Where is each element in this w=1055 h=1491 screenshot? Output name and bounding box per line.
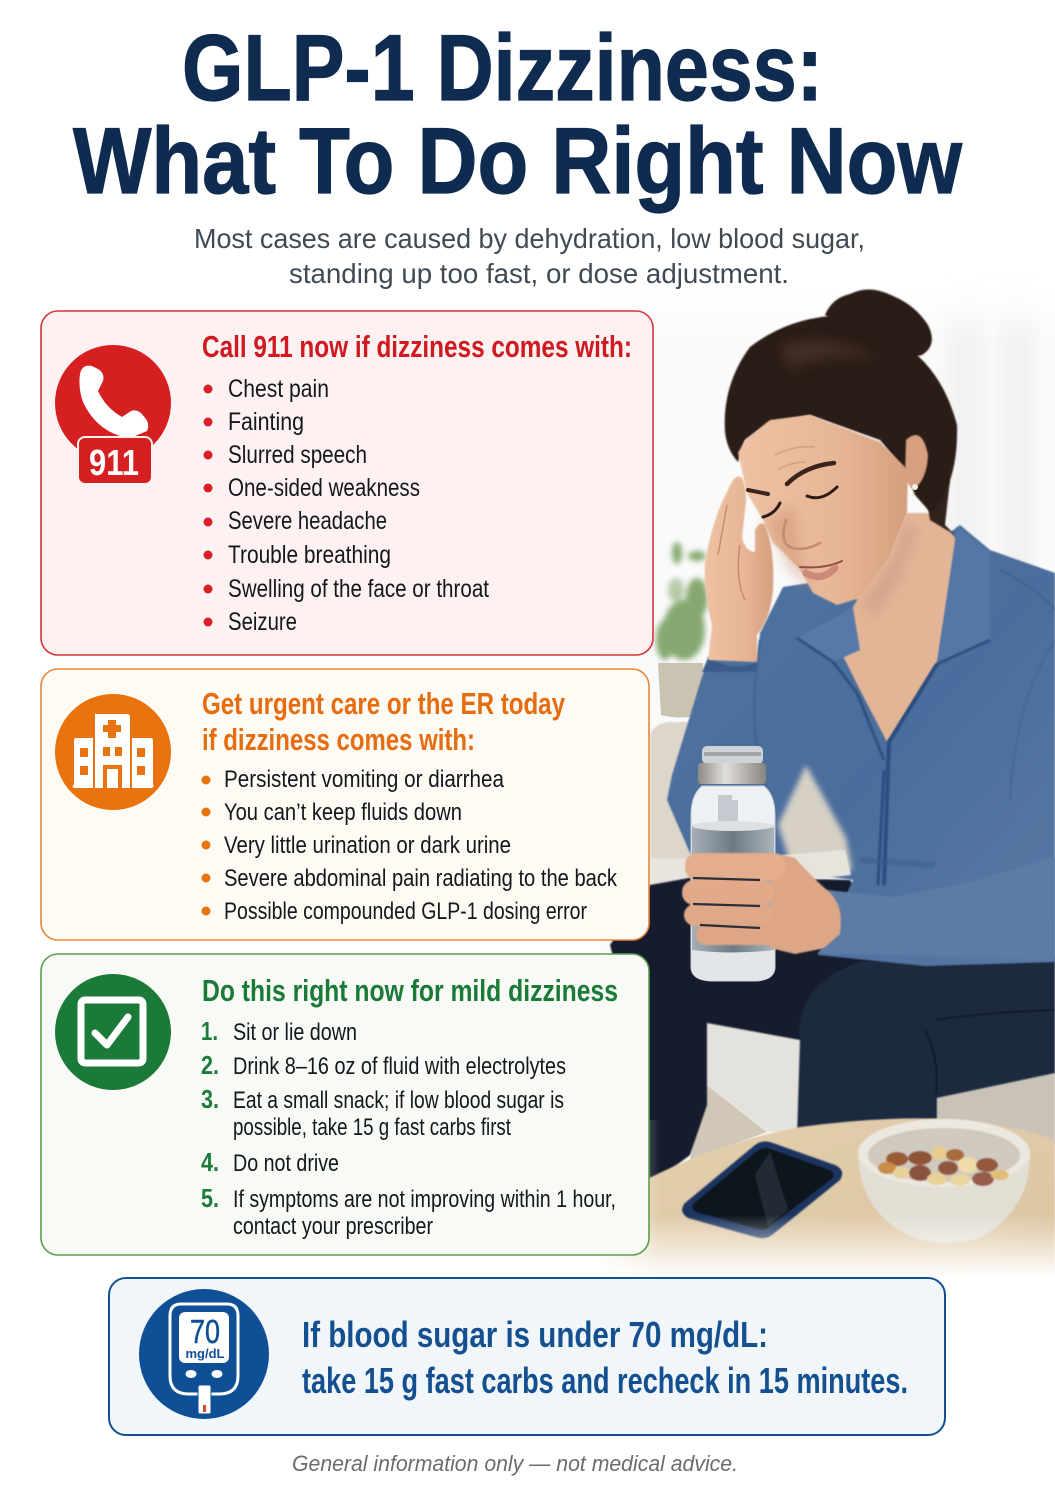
photo edge fades xyxy=(590,1120,1055,1290)
earring xyxy=(912,484,918,490)
hair xyxy=(725,316,957,512)
sofa xyxy=(650,722,1055,1145)
symptom list: Trouble breathing xyxy=(228,541,391,569)
icon: glucose meter: 70 xyxy=(190,1313,220,1350)
panel: blood sugar callout xyxy=(109,1278,945,1435)
symptom list: Severe abdominal pain radiating to the back xyxy=(224,865,618,892)
face shading xyxy=(765,505,812,590)
symptom list: Possible compounded GLP-1 dosing error xyxy=(224,898,587,925)
heading: Do this right now for mild dizziness xyxy=(202,973,618,1008)
table xyxy=(600,1118,1055,1282)
symptom list: Swelling of the face or throat xyxy=(228,575,489,603)
blue jacket xyxy=(667,525,1055,966)
potted plant xyxy=(656,542,708,718)
icon: glucose meter xyxy=(139,1289,269,1419)
symptom list: Fainting xyxy=(228,408,304,436)
numbered steps: Eat a small snack; if low blood sugar is xyxy=(233,1087,564,1114)
floor xyxy=(690,1085,767,1160)
subtitle xyxy=(194,223,865,289)
heading: Get urgent care or the ER today xyxy=(202,686,566,721)
numbered steps: Sit or lie down xyxy=(233,1019,357,1046)
callout text: If blood sugar is under 70 mg/dL: xyxy=(302,1314,768,1355)
numbered steps: 1. xyxy=(201,1016,218,1046)
title: GLP-1 Dizziness: xyxy=(182,15,823,120)
subtitle: standing up too fast, or dose adjustment. xyxy=(289,258,789,289)
photo: woman with dizziness holding a water bottle xyxy=(590,285,1055,1290)
numbered steps: 2. xyxy=(201,1050,219,1080)
heading: Call 911 now if dizziness comes with: xyxy=(202,329,632,364)
neck shadow xyxy=(862,522,918,618)
symptom list: One-sided weakness xyxy=(228,474,420,502)
numbered steps: possible, take 15 g fast carbs first xyxy=(233,1114,511,1141)
title xyxy=(73,15,963,213)
icon: glucose meter: mg/dL xyxy=(186,1346,225,1361)
forehead wrinkles xyxy=(775,447,815,470)
symptom list: Very little urination or dark urine xyxy=(224,832,511,859)
facial features xyxy=(748,463,842,577)
heading: if dizziness comes with: xyxy=(202,722,475,757)
numbered steps: Do not drive xyxy=(233,1150,339,1177)
symptom list: Seizure xyxy=(228,608,297,636)
jacket collars and zip xyxy=(797,527,990,885)
callout text xyxy=(302,1314,908,1401)
panel: urgent care xyxy=(41,669,649,940)
numbered steps: Drink 8–16 oz of fluid with electrolytes xyxy=(233,1053,566,1080)
icon: hospital xyxy=(55,694,171,810)
numbered steps: contact your prescriber xyxy=(233,1213,433,1240)
icon: phone 911 xyxy=(55,345,171,484)
hair highlight xyxy=(780,340,880,370)
numbered steps: 5. xyxy=(201,1183,219,1213)
face xyxy=(738,415,908,605)
numbered steps: 4. xyxy=(201,1147,219,1177)
icon: checkbox xyxy=(55,974,171,1090)
icon: phone 911: 911 xyxy=(89,442,139,483)
hand holding bottle xyxy=(682,853,842,954)
title: What To Do Right Now xyxy=(73,108,963,213)
sofa cushion xyxy=(707,1020,802,1132)
nape hair xyxy=(925,480,955,535)
numbered steps xyxy=(201,1016,616,1240)
sofa seat lower strip xyxy=(782,850,851,880)
room background xyxy=(600,285,1055,1280)
heading xyxy=(202,686,566,757)
bowl of nuts xyxy=(858,1119,1030,1243)
footer disclaimer: General information only — not medical advice. xyxy=(292,1451,738,1476)
hand creases xyxy=(718,505,745,600)
symptom list: Severe headache xyxy=(228,507,387,535)
numbered steps: If symptoms are not improving within 1 hour, xyxy=(233,1186,616,1213)
water bottle xyxy=(691,746,775,981)
symptom list: Chest pain xyxy=(228,375,329,403)
sleeve cuff xyxy=(817,857,1055,960)
subtitle: Most cases are caused by dehydration, low blood sugar, xyxy=(194,223,865,254)
finger shadows xyxy=(693,878,760,928)
dark leggings xyxy=(610,876,1055,1185)
hair bun xyxy=(825,289,932,356)
symptom list xyxy=(202,766,618,925)
panel: call 911 xyxy=(41,311,653,655)
symptom list: Slurred speech xyxy=(228,441,367,469)
symptom list: Persistent vomiting or diarrhea xyxy=(224,766,505,793)
symptom list xyxy=(204,375,489,636)
numbered steps: 3. xyxy=(201,1084,219,1114)
panel: mild dizziness steps xyxy=(41,954,649,1255)
neck xyxy=(835,513,957,742)
sofa gap between arm and torso xyxy=(778,765,852,878)
symptom list: You can’t keep fluids down xyxy=(224,799,462,826)
phone xyxy=(682,1141,842,1238)
ear xyxy=(905,435,928,490)
raised hand at temple xyxy=(705,476,773,662)
